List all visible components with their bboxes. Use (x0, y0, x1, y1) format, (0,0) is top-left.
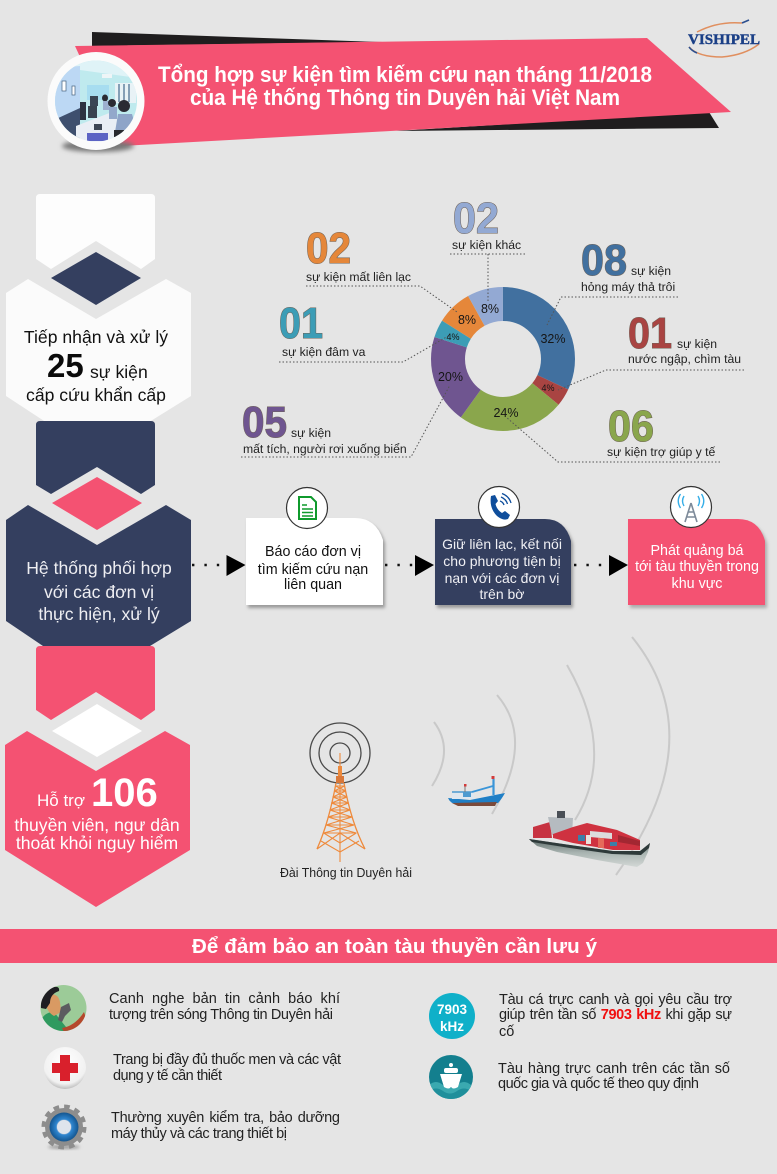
icon: document (286, 488, 328, 528)
ribbon back fold right (396, 112, 719, 131)
step 3 hexagon: rescued people: Hỗ trợ (37, 791, 85, 810)
text: maintain machinery: máy thủy và các trang thiết bị (111, 1126, 287, 1142)
step 1 hexagon: received events: cấp cứu khẩn cấp (26, 385, 166, 405)
label: medical assistance (607, 402, 715, 459)
label: collision: 01 (279, 299, 323, 348)
step 1 hexagon: received events: Tiếp nhận và xử lý (24, 327, 168, 347)
text: cargo vessels frequency (498, 1061, 730, 1092)
icon: person with radio (40, 985, 86, 1032)
step 1 tab: white (36, 194, 155, 269)
donut chart (448, 304, 558, 414)
text: fishing vessels frequency (499, 992, 732, 1040)
step 1 hexagon: received events: sự kiện (90, 362, 148, 382)
tower caption: Đài Thông tin Duyên hải (280, 866, 412, 880)
icon: gear (44, 1107, 84, 1149)
label: medical assistance: sự kiện trợ giúp y tế (607, 445, 715, 459)
step 2 hexagon: coordination: Hệ thống phối hợp (26, 558, 172, 578)
header photo (48, 52, 144, 152)
label: engine failure: sự kiện (631, 264, 671, 278)
text: medical supplies (113, 1052, 341, 1084)
donut percentages: 4% (446, 332, 460, 342)
label: engine failure: hỏng máy thả trôi (581, 280, 675, 294)
step 3 hexagon: rescued people: thuyền viên, ngư dân (14, 815, 180, 835)
text: maintain machinery (111, 1110, 340, 1142)
step 2 tab: navy (36, 421, 155, 494)
donut percentages: 8% (458, 313, 476, 327)
ribbon (75, 38, 731, 146)
step 3 hexagon: rescued people (5, 731, 190, 907)
label: collision: sự kiện đâm va (282, 345, 366, 359)
icon: coastal radio tower (310, 723, 370, 862)
donut percentages (438, 302, 566, 420)
ribbon back fold left (92, 32, 380, 46)
card: report (246, 518, 385, 608)
label: missing persons: sự kiện (291, 426, 331, 440)
header banner (75, 32, 731, 146)
donut percentages: 4% (541, 383, 555, 393)
label: medical assistance: 06 (608, 402, 654, 451)
icon: 7903 kHz (429, 993, 475, 1039)
card: broadcast (628, 519, 767, 608)
donut percentages: 20% (438, 370, 463, 384)
arrow 1 (192, 555, 246, 576)
text: medical supplies: dụng y tế cần thiết (113, 1068, 222, 1084)
text: cargo vessels frequency: quốc gia và quốc tế theo quy định (498, 1076, 699, 1092)
leader lines (241, 254, 744, 462)
icon: 7903 kHz: 7903 (437, 1002, 468, 1017)
arrow 2 (385, 555, 434, 576)
text: cargo vessels frequency: Tàu hàng trực canh trên các tần số (498, 1061, 730, 1077)
card: report: liên quan (284, 577, 342, 593)
card: report: tìm kiếm cứu nạn (258, 562, 368, 578)
text: fishing vessels frequency: giúp trên tần số 7903 kHz khi gặp sự (499, 1007, 732, 1023)
text: listen to weather bulletins: Canh nghe bản tin cảnh báo khí (109, 991, 340, 1007)
label: missing persons (242, 398, 407, 456)
step 3 hexagon: rescued people: thoát khỏi nguy hiểm (16, 833, 178, 853)
text: medical supplies: Trang bị đầy đủ thuốc men và các vật (113, 1052, 341, 1068)
card: keep contact: cho phương tiện bị (443, 553, 561, 569)
icon: antenna (670, 486, 712, 528)
label: lost contact (306, 224, 411, 284)
card: broadcast: tới tàu thuyền trong (635, 559, 759, 575)
card: report: Báo cáo đơn vị (265, 544, 361, 560)
radio waves (432, 637, 669, 875)
label: other events (452, 194, 521, 252)
section bar: safety notes: Để đảm bảo an toàn tàu thuyền cần lưu ý (192, 935, 598, 958)
title: của Hệ thống Thông tin Duyên hải Việt Nam (190, 85, 620, 110)
label: other events: sự kiện khác (452, 238, 521, 252)
diamond: navy (51, 252, 141, 305)
card: broadcast: Phát quảng bá (650, 543, 744, 559)
diamond: pink (52, 477, 142, 530)
arrow 3 (574, 555, 628, 576)
label: flooding, sinking: nước ngập, chìm tàu (628, 352, 741, 366)
logo VISHIPEL: VISHIPEL (688, 32, 760, 48)
label: engine failure (581, 236, 675, 294)
icon: 7903 kHz: kHz (440, 1019, 464, 1034)
title (158, 62, 652, 110)
label: missing persons: 05 (242, 398, 287, 447)
title: Tổng hợp sự kiện tìm kiếm cứu nạn tháng 11/2018 (158, 62, 652, 87)
icon: ship on waves (429, 1055, 473, 1100)
label: flooding, sinking: 01 (628, 309, 672, 358)
text: fishing vessels frequency: cố (499, 1024, 514, 1040)
icon: red cross (44, 1047, 86, 1089)
step 2 hexagon: coordination: với các đơn vị (44, 582, 154, 602)
card: keep contact (435, 519, 573, 608)
text: maintain machinery: Thường xuyên kiểm tra, bảo dưỡng (111, 1110, 340, 1126)
card: keep contact: trên bờ (480, 586, 524, 602)
label: other events: 02 (453, 194, 499, 243)
donut percentages: 8% (481, 302, 499, 316)
text: listen to weather bulletins (109, 991, 340, 1023)
text: fishing vessels frequency: Tàu cá trực canh và gọi yêu cầu trợ (499, 992, 732, 1008)
diamond: white (52, 704, 142, 757)
step 1 hexagon: received events: 25 (47, 347, 84, 384)
donut percentages: 24% (493, 406, 519, 420)
label: lost contact: 02 (306, 224, 351, 273)
step 1 hexagon: received events (6, 279, 191, 455)
step 2 hexagon: coordination (6, 505, 191, 646)
icon: phone (478, 486, 520, 528)
card: keep contact: Giữ liên lạc, kết nối (442, 536, 562, 552)
label: collision (279, 299, 366, 359)
label: missing persons: mất tích, người rơi xuống biển (243, 442, 407, 456)
fishing boat (448, 776, 505, 806)
card: keep contact: nạn với các đơn vị (445, 570, 559, 586)
logo VISHIPEL (688, 20, 760, 57)
card: broadcast: khu vực (672, 576, 722, 592)
donut percentages: 32% (540, 332, 566, 346)
step 3 tab: pink (36, 646, 155, 720)
section bar: safety notes (0, 929, 777, 963)
label: flooding, sinking: sự kiện (677, 337, 717, 351)
step 2 hexagon: coordination: thực hiện, xử lý (38, 604, 160, 624)
label: flooding, sinking (628, 309, 741, 366)
step 3 hexagon: rescued people: 106 (91, 771, 158, 815)
text: listen to weather bulletins: tượng trên sóng Thông tin Duyên hải (109, 1007, 333, 1023)
label: engine failure: 08 (581, 236, 627, 285)
container ship (529, 811, 650, 867)
label: lost contact: sự kiện mất liên lạc (306, 270, 411, 284)
